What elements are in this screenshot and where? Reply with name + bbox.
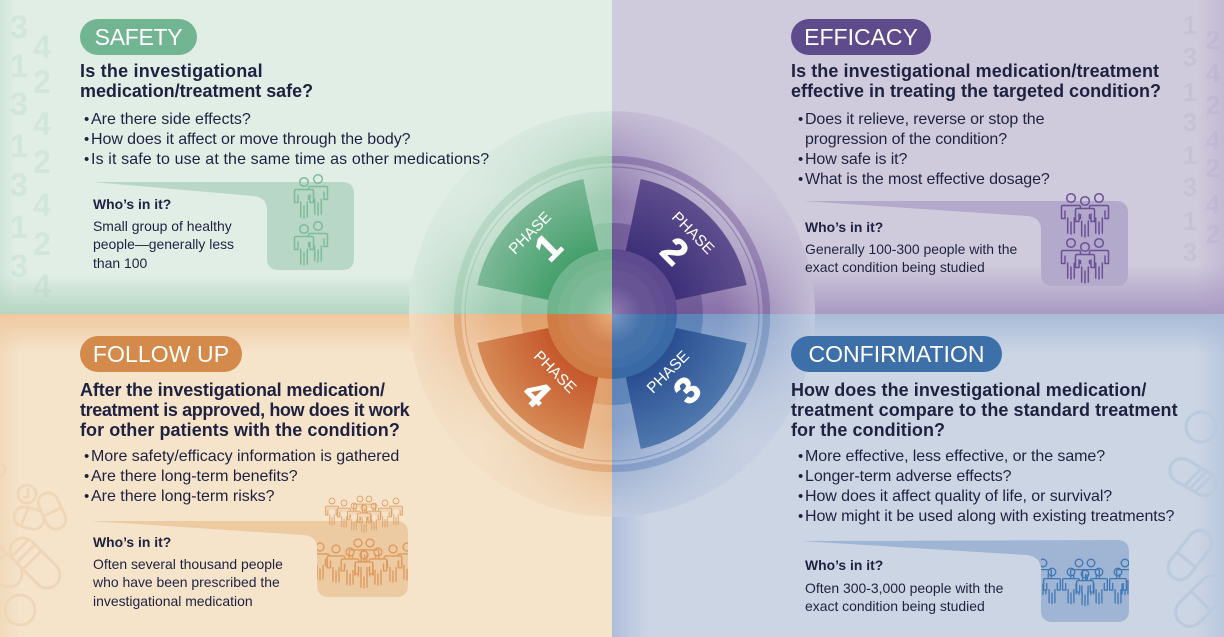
- panel: efficacy: 4: [1206, 189, 1221, 219]
- panel: confirmation: •: [798, 488, 803, 505]
- panel: safety: 4: [33, 187, 51, 223]
- bullet list: follow up: Are there long-term risks?: [91, 488, 275, 505]
- panel: efficacy: 3: [1183, 172, 1197, 202]
- question: confirmation: [791, 380, 1178, 440]
- bullet list: efficacy: progression of the condition?: [805, 131, 1007, 148]
- panel: safety: 2: [33, 64, 51, 100]
- panel: safety: 3: [10, 86, 28, 122]
- callout: who's in it, safety: Small group of healthy: [93, 218, 232, 234]
- heading pill: safety: SAFETY: [95, 24, 182, 50]
- callout: who's in it, safety: Who’s in it?: [93, 196, 171, 212]
- phase 3 sector: PHASE: [644, 348, 693, 397]
- bullet list: confirmation: Longer-term adverse effects?: [805, 468, 1011, 485]
- callout: who's in it, efficacy: Generally 100-300 people with the: [805, 241, 1017, 257]
- panel: efficacy: 2: [1206, 153, 1220, 183]
- phase 4 sector: [477, 328, 598, 449]
- bullet list: efficacy: How safe is it?: [805, 151, 907, 168]
- bullet list: follow up: Are there long-term benefits?: [91, 468, 298, 485]
- panel: safety: 4: [33, 106, 51, 142]
- callout: who's in it, efficacy: Who’s in it?: [805, 219, 883, 235]
- panel: safety: 3: [10, 167, 28, 203]
- panel: efficacy: 3: [1183, 42, 1197, 72]
- heading pill: efficacy: EFFICACY: [804, 24, 918, 50]
- phase 2 sector: 2: [653, 230, 696, 273]
- phase 3 sector: 3: [666, 369, 709, 412]
- panel: follow up: •: [84, 468, 89, 485]
- bullet list: confirmation: How might it be used along with existing treatments?: [805, 508, 1174, 525]
- callout: who's in it, safety: [93, 174, 354, 271]
- bullet list: safety: [84, 111, 489, 168]
- bullet list: confirmation: More effective, less effective, or the same?: [805, 448, 1105, 465]
- panel: efficacy: 2: [1206, 25, 1220, 55]
- question: efficacy: [791, 61, 1161, 101]
- callout: who's in it, efficacy: [805, 193, 1128, 286]
- icon: pills background: [0, 464, 69, 625]
- panel: efficacy: 4: [1206, 125, 1221, 155]
- panel: efficacy: 1: [1183, 140, 1197, 170]
- heading pill: follow up: FOLLOW UP: [93, 341, 229, 367]
- callout: who's in it, confirmation: Often 300-3,000 people with the: [805, 580, 1003, 596]
- bullet list: efficacy: Does it relieve, reverse or stop the: [805, 111, 1044, 128]
- bullet list: safety: Is it safe to use at the same time as other medications?: [91, 151, 489, 168]
- bullet list: efficacy: [798, 111, 1050, 188]
- panel: follow up: •: [84, 488, 89, 505]
- panel: confirmation: [612, 314, 1224, 637]
- question: follow up: After the investigational medication/: [80, 380, 385, 400]
- question: confirmation: for the condition?: [791, 420, 945, 440]
- icon: pills background: [1163, 412, 1224, 632]
- phase 1 sector: 1: [527, 226, 570, 269]
- callout: who's in it, follow up: who have been prescribed the: [93, 574, 280, 590]
- bullet list: follow up: [84, 448, 399, 505]
- panel: efficacy: 3: [1183, 107, 1197, 137]
- question: follow up: [80, 380, 410, 440]
- callout: who's in it, efficacy: exact condition being studied: [805, 259, 985, 275]
- panel: follow up: investigational medication: [93, 593, 253, 609]
- panel: efficacy: 2: [1206, 90, 1220, 120]
- bullet list: safety: How does it affect or move through the body?: [91, 131, 410, 148]
- panel: efficacy: [612, 0, 1224, 314]
- bullet list: follow up: More safety/efficacy information is gathered: [91, 448, 399, 465]
- panel: efficacy: •: [798, 111, 803, 128]
- icon: two rows of people: [294, 175, 328, 265]
- panel: safety: 4: [33, 29, 51, 65]
- phase 1 sector: PHASE: [506, 209, 555, 258]
- icon: crowd of people, small: [326, 496, 402, 532]
- callout: who's in it, follow up: [92, 496, 408, 609]
- bullet list: confirmation: [798, 448, 1174, 525]
- icon: crowd of people: [1035, 559, 1133, 606]
- question: efficacy: Is the investigational medication/treatment: [791, 61, 1159, 81]
- panel: safety: •: [84, 151, 89, 168]
- question: safety: Is the investigational: [80, 61, 263, 81]
- heading pill: confirmation: [791, 336, 1002, 372]
- bullet list: safety: Are there side effects?: [91, 111, 251, 128]
- question: confirmation: How does the investigational medication/: [791, 380, 1146, 400]
- panel: efficacy: 1: [1183, 10, 1197, 40]
- panel: safety: 2: [33, 144, 51, 180]
- heading pill: efficacy: [791, 19, 931, 55]
- callout: who's in it, follow up: Who’s in it?: [93, 534, 171, 550]
- panel: safety: 1: [10, 48, 28, 84]
- phase 4 sector: PHASE: [530, 348, 579, 397]
- bullet list: confirmation: How does it affect quality of life, or survival?: [805, 488, 1112, 505]
- panel: efficacy: •: [798, 171, 803, 188]
- question: safety: [80, 61, 313, 101]
- panel: follow up: •: [84, 448, 89, 465]
- hub: [547, 249, 677, 379]
- panel: safety: •: [84, 131, 89, 148]
- question: follow up: for other patients with the condition?: [80, 420, 400, 440]
- panel: confirmation: •: [798, 508, 803, 525]
- panel: safety: 3: [10, 9, 28, 45]
- callout: who's in it, safety: people—generally less: [93, 236, 234, 252]
- question: follow up: treatment is approved, how does it work: [80, 400, 409, 420]
- phase 1 sector: [477, 179, 598, 300]
- question: safety: medication/treatment safe?: [80, 81, 313, 101]
- phase 2 sector: PHASE: [668, 209, 717, 258]
- panel: safety: •: [84, 111, 89, 128]
- panel: confirmation: •: [798, 448, 803, 465]
- panel: safety: [0, 0, 612, 314]
- panel: confirmation: •: [798, 468, 803, 485]
- panel: safety: 1: [10, 128, 28, 164]
- callout: who's in it, confirmation: exact condition being studied: [805, 598, 985, 614]
- icon: crowd of people, large: [311, 539, 416, 588]
- panel: safety: 4: [33, 268, 51, 304]
- panel: efficacy: 4: [1206, 58, 1221, 88]
- panel: safety: 3: [10, 248, 28, 284]
- phase 4 sector: 4: [515, 372, 559, 415]
- panel: safety: 1: [10, 209, 28, 245]
- phase 2 sector: [626, 179, 747, 300]
- callout: who's in it, confirmation: Who’s in it?: [805, 557, 883, 573]
- panel: follow up: [0, 314, 612, 637]
- panel: efficacy: 3: [1183, 237, 1197, 267]
- callout: who's in it, confirmation: [802, 540, 1129, 622]
- central phase wheel: [454, 156, 770, 472]
- panel: efficacy: •: [798, 151, 803, 168]
- heading pill: follow up: [80, 336, 242, 372]
- heading pill: confirmation: CONFIRMATION: [809, 341, 984, 367]
- panel: efficacy: 1: [1183, 77, 1197, 107]
- phase 3 sector: [626, 328, 747, 449]
- question: efficacy: effective in treating the targeted condition?: [791, 81, 1161, 101]
- panel: safety: 2: [33, 226, 51, 262]
- panel: efficacy: 1: [1183, 206, 1197, 236]
- callout: who's in it, follow up: Often several thousand people: [93, 556, 283, 572]
- callout: who's in it, safety: than 100: [93, 255, 147, 271]
- heading pill: safety: [80, 19, 197, 55]
- icon: two rows of people: [1062, 194, 1108, 283]
- bullet list: efficacy: What is the most effective dosage?: [805, 171, 1050, 188]
- question: confirmation: treatment compare to the standard treatment: [791, 400, 1178, 420]
- panel: efficacy: 2: [1206, 219, 1220, 249]
